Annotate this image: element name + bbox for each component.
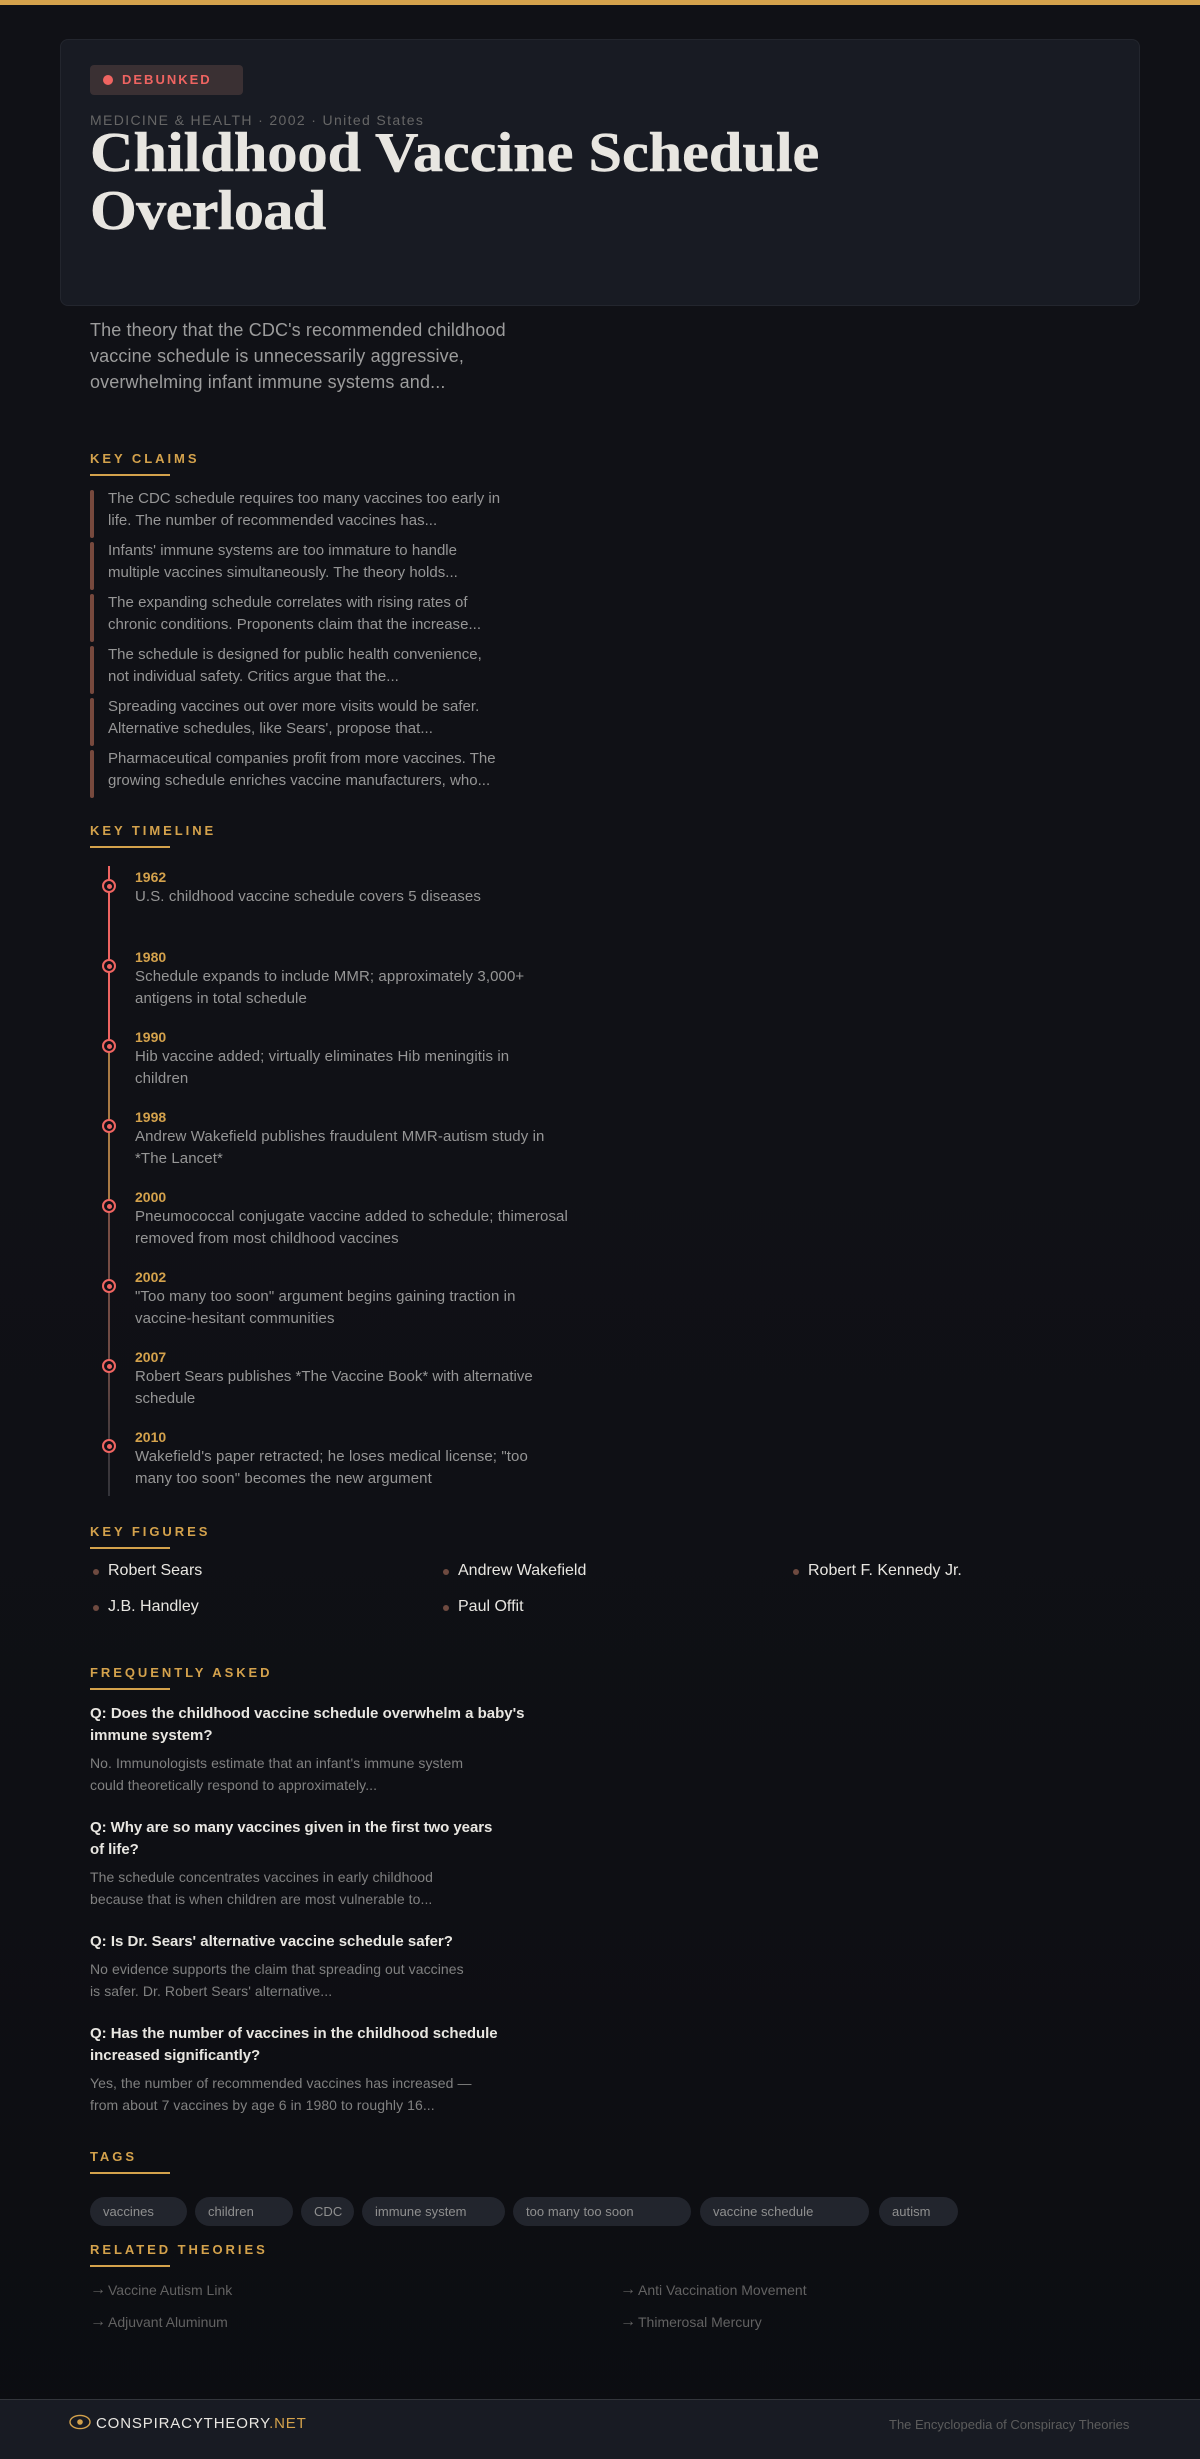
event 2010: Wakefield's paper retracted; he loses medical license; "too (135, 1448, 528, 1465)
claim 1: The CDC schedule requires too many vaccines too early in (108, 490, 500, 507)
figure: Andrew Wakefield: Andrew Wakefield (458, 1562, 586, 1579)
tag: too many too soon: too many too soon (526, 2204, 634, 2219)
answer 3: is safer. Dr. Robert Sears' alternative... (90, 1983, 332, 1999)
category and year meta line: MEDICINE & HEALTH · 2002 · United States (90, 112, 424, 128)
event 2002: 2002 (135, 1269, 166, 1285)
related link: Thimerosal Mercury: → (620, 2313, 636, 2330)
event 2002: "Too many too soon" argument begins gaining traction in (135, 1288, 516, 1305)
event 1990: Hib vaccine added; virtually eliminates Hib meningitis in (135, 1048, 509, 1065)
question 1: immune system? (90, 1727, 213, 1744)
answer 3 (90, 1961, 464, 1999)
related link: Anti Vaccination Movement (620, 2279, 807, 2301)
event 1962: U.S. childhood vaccine schedule covers 5 diseases (135, 888, 481, 905)
question 2: of life? (90, 1841, 139, 1858)
tag: autism (879, 2197, 958, 2226)
claim 2: Infants' immune systems are too immature to handle (108, 542, 457, 559)
claim 4 (90, 646, 482, 694)
heading: key timeline: KEY TIMELINE (90, 823, 216, 838)
figure: J.B. Handley: J.B. Handley (108, 1598, 199, 1615)
related link: Adjuvant Aluminum (90, 2311, 228, 2333)
related link: Anti Vaccination Movement: Anti Vaccination Movement (638, 2282, 807, 2298)
question 1: Q: Does the childhood vaccine schedule overwhelm a baby's (90, 1705, 525, 1722)
claim 2 (90, 542, 458, 590)
answer 4: from about 7 vaccines by age 6 in 1980 to roughly 16... (90, 2097, 435, 2113)
summary text: overwhelming infant immune systems and... (90, 372, 445, 392)
answer 4 (90, 2075, 472, 2113)
title (90, 122, 819, 242)
answer 2 (90, 1869, 433, 1907)
panel: related theories (90, 2242, 807, 2330)
event 2000: removed from most childhood vaccines (135, 1230, 399, 1247)
event 2007: 2007 (135, 1349, 166, 1365)
claim 1 (90, 490, 500, 538)
question 4 (90, 2025, 498, 2064)
event 1998: *The Lancet* (135, 1150, 223, 1167)
event 1980: 1980 (135, 949, 166, 965)
question 4: Q: Has the number of vaccines in the childhood schedule (90, 2025, 498, 2042)
event 1998: Andrew Wakefield publishes fraudulent MMR-autism study in (135, 1128, 544, 1145)
event 1998 (102, 1109, 544, 1167)
related link: Thimerosal Mercury: Thimerosal Mercury (638, 2314, 762, 2330)
heading: related theories: RELATED THEORIES (90, 2242, 268, 2257)
answer 4: Yes, the number of recommended vaccines has increased — (90, 2075, 472, 2091)
event 1990 (102, 1029, 509, 1087)
event 1990: 1990 (135, 1029, 166, 1045)
event 2000: Pneumococcal conjugate vaccine added to schedule; thimerosal (135, 1208, 568, 1225)
tag: autism: autism (892, 2204, 931, 2219)
tag: vaccine schedule: vaccine schedule (713, 2204, 813, 2219)
event 1980: Schedule expands to include MMR; approximately 3,000+ (135, 968, 524, 985)
tag: CDC: CDC (314, 2204, 342, 2219)
summary text (90, 320, 506, 392)
heading: key claims: KEY CLAIMS (90, 451, 199, 466)
claim 5: Spreading vaccines out over more visits would be safer. (108, 698, 479, 715)
claim 6: growing schedule enriches vaccine manufacturers, who... (108, 772, 490, 789)
heading: key figures: KEY FIGURES (90, 1524, 210, 1539)
panel: key timeline (90, 823, 568, 1496)
claim 5: Alternative schedules, like Sears', propose that... (108, 720, 433, 737)
panel: key claims (90, 451, 500, 798)
tag: vaccines: vaccines (103, 2204, 154, 2219)
event 2010: 2010 (135, 1429, 166, 1445)
panel: hero header (60, 39, 1140, 306)
figure: Paul Offit: Paul Offit (458, 1598, 524, 1615)
question 1 (90, 1705, 525, 1744)
timeline spine (108, 866, 110, 1496)
event 1980 (102, 949, 524, 1007)
related link: Vaccine Autism Link: Vaccine Autism Link (108, 2282, 232, 2298)
claim 6: Pharmaceutical companies profit from more vaccines. The (108, 750, 496, 767)
question 2: Q: Why are so many vaccines given in the first two years (90, 1819, 492, 1836)
event 2010: many too soon" becomes the new argument (135, 1470, 432, 1487)
claim 4: The schedule is designed for public health convenience, (108, 646, 482, 663)
related link: Vaccine Autism Link: → (90, 2281, 106, 2298)
footer (0, 2399, 1200, 2459)
claim 6 (90, 750, 496, 798)
related link: Adjuvant Aluminum: Adjuvant Aluminum (108, 2314, 228, 2330)
answer 2: because that is when children are most vulnerable to... (90, 1891, 432, 1907)
title: Childhood Vaccine Schedule (90, 122, 819, 184)
event 2002 (102, 1269, 516, 1327)
title: Overload (90, 180, 326, 242)
event 2007: Robert Sears publishes *The Vaccine Book* with alternative (135, 1368, 533, 1385)
event 1980: antigens in total schedule (135, 990, 307, 1007)
tag: CDC (301, 2197, 354, 2226)
summary text: The theory that the CDC's recommended childhood (90, 320, 506, 340)
heading: tags: TAGS (90, 2149, 137, 2164)
top accent bar (0, 0, 1200, 5)
answer 1: could theoretically respond to approximately... (90, 1777, 377, 1793)
claim 3 (90, 594, 481, 642)
claim 5 (90, 698, 479, 746)
related link: Anti Vaccination Movement: → (620, 2281, 636, 2298)
related link: Adjuvant Aluminum: → (90, 2313, 106, 2330)
event 2010 (102, 1429, 528, 1487)
figure: Robert Sears: Robert Sears (108, 1562, 202, 1579)
question 2 (90, 1819, 492, 1858)
event 2007 (102, 1349, 533, 1407)
claim 3: chronic conditions. Proponents claim that the increase... (108, 616, 481, 633)
figure: Robert F. Kennedy Jr.: Robert F. Kennedy Jr. (808, 1562, 962, 1579)
question 3: Q: Is Dr. Sears' alternative vaccine schedule safer? (90, 1933, 453, 1950)
footer tagline: The Encyclopedia of Conspiracy Theories (889, 2417, 1129, 2432)
answer 1: No. Immunologists estimate that an infant's immune system (90, 1755, 463, 1771)
event 1998: 1998 (135, 1109, 166, 1125)
related link: Thimerosal Mercury (620, 2311, 762, 2333)
summary text: vaccine schedule is unnecessarily aggressive, (90, 346, 464, 366)
tag: vaccines (90, 2197, 187, 2226)
claim 1: life. The number of recommended vaccines has... (108, 512, 437, 529)
answer 2: The schedule concentrates vaccines in early childhood (90, 1869, 433, 1885)
answer 3: No evidence supports the claim that spreading out vaccines (90, 1961, 464, 1977)
site wordmark: CONSPIRACYTHEORY.NET (96, 2415, 307, 2432)
claim 3: The expanding schedule correlates with rising rates of (108, 594, 468, 611)
event 2002: vaccine-hesitant communities (135, 1310, 335, 1327)
event 2007: schedule (135, 1390, 195, 1407)
tag: immune system (362, 2197, 505, 2226)
related link: Vaccine Autism Link (90, 2279, 232, 2301)
event 2000: 2000 (135, 1189, 166, 1205)
claim 2: multiple vaccines simultaneously. The theory holds... (108, 564, 458, 581)
tag: vaccine schedule (700, 2197, 869, 2226)
tag: children: children (208, 2204, 254, 2219)
tag list (90, 2197, 958, 2226)
event 1962 (102, 869, 481, 905)
event 2000 (102, 1189, 568, 1247)
tag: immune system: immune system (375, 2204, 467, 2219)
answer 1 (90, 1755, 463, 1793)
panel: key figures (90, 1524, 962, 1615)
heading: frequently asked: FREQUENTLY ASKED (90, 1665, 273, 1680)
question 4: increased significantly? (90, 2047, 260, 2064)
panel: frequently asked questions (90, 1665, 525, 2113)
tag: children (195, 2197, 293, 2226)
icon: status dot (103, 75, 113, 85)
claim 4: not individual safety. Critics argue that the... (108, 668, 399, 685)
tag: too many too soon (513, 2197, 691, 2226)
status badge: debunked (90, 65, 243, 95)
event 1990: children (135, 1070, 188, 1087)
event 1962: 1962 (135, 869, 166, 885)
icon: eye logo (69, 2414, 91, 2430)
badge label: DEBUNKED (122, 72, 212, 87)
